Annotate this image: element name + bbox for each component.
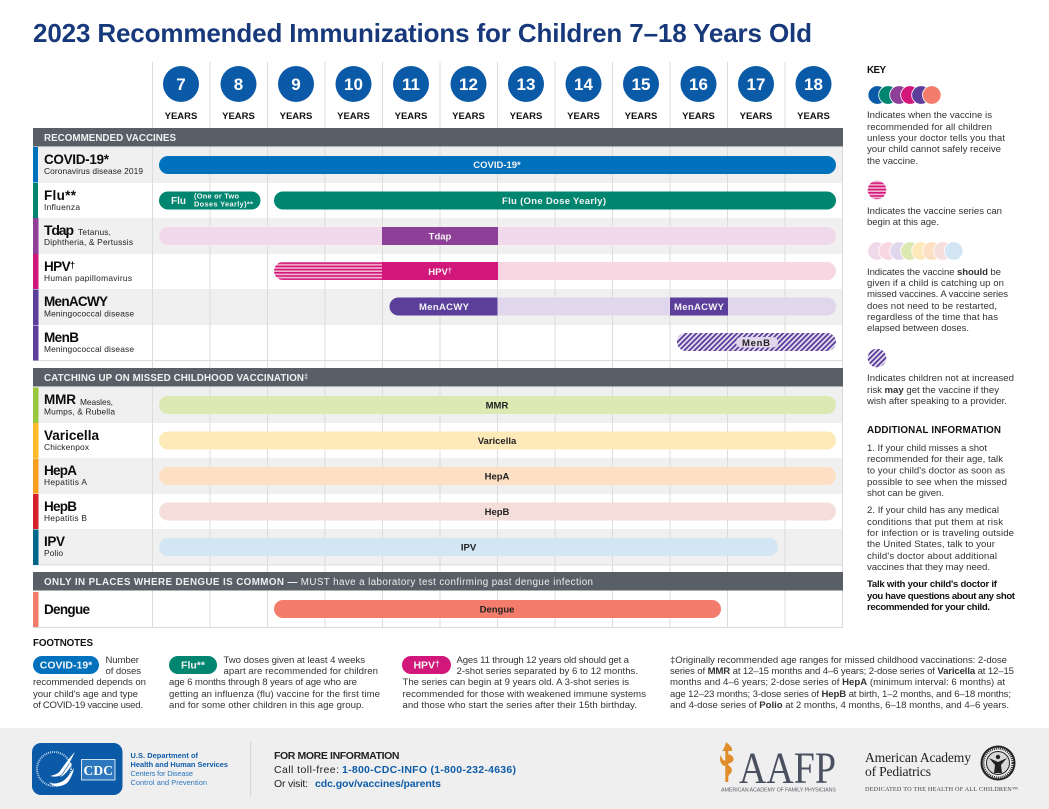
age header: 14 bbox=[574, 75, 593, 94]
section band: dengue bbox=[33, 572, 843, 590]
contact information: cdc.gov/vaccines/parents bbox=[315, 778, 441, 790]
section band: recommended vaccines bbox=[33, 128, 843, 146]
row: MenACWY: MenACWY bbox=[44, 294, 108, 309]
footnote: Flu: age 6 months through 8 years of age who are bbox=[169, 677, 357, 688]
footnote: catch-up ages: months and 4–6 years; 2-dose series of HepA (minimum interval: 6 months) at bbox=[670, 677, 1005, 688]
row: COVID-19 bbox=[33, 147, 836, 182]
row: HepB: HepB bbox=[485, 507, 510, 518]
footnote: HPV: Ages 11 through 12 years old should get a bbox=[456, 655, 630, 666]
key: striped text: begin at this age. bbox=[867, 217, 939, 228]
age header: 9 bbox=[291, 75, 301, 94]
row: Tdap: Tetanus, bbox=[78, 227, 111, 237]
row: Flu: (One or Two bbox=[194, 192, 239, 200]
row: Dengue: Dengue bbox=[480, 604, 514, 616]
key: striped text: Indicates the vaccine series can bbox=[867, 206, 1002, 217]
logo: American Academy of Pediatrics bbox=[865, 746, 1018, 793]
key: catch-up text: Indicates the vaccine should be bbox=[867, 267, 1001, 278]
additional information: possible to see when the missed bbox=[867, 477, 1007, 488]
age header: YEARS bbox=[797, 111, 830, 122]
age header: 10 bbox=[344, 75, 363, 94]
row: IPV: Polio bbox=[44, 548, 63, 558]
key: catch-up text bbox=[867, 267, 1008, 334]
row: Varicella: Varicella bbox=[478, 436, 517, 447]
HHS text: Health and Human Services bbox=[130, 760, 228, 769]
row: MMR bbox=[33, 388, 836, 423]
row: Flu: Doses Yearly)** bbox=[194, 200, 253, 208]
section band: catching up: ‡ bbox=[304, 374, 308, 381]
logo: CDC: CDC bbox=[84, 763, 113, 778]
additional information: vaccines that they may need. bbox=[867, 562, 990, 573]
age header: YEARS bbox=[740, 111, 772, 122]
key: catch-up text: elapsed between doses. bbox=[867, 323, 969, 334]
row: Flu: Flu bbox=[171, 196, 186, 207]
additional information: shot can be given. bbox=[867, 488, 944, 499]
age header: 8 bbox=[234, 75, 243, 94]
row: Tdap: Tdap bbox=[44, 222, 74, 238]
row: HepB: Hepatitis B bbox=[44, 513, 87, 523]
age header: 17 bbox=[747, 75, 765, 94]
footnote: COVID-19: COVID-19* bbox=[40, 660, 93, 672]
age header: 13 bbox=[517, 75, 535, 94]
additional information: you have questions about any shot bbox=[867, 591, 1016, 602]
key: recommended text: unless your doctor tells you that bbox=[867, 133, 1005, 144]
key: hatched swatch bbox=[868, 349, 886, 367]
key: recommended text: Indicates when the vaccine is bbox=[867, 110, 992, 121]
row: HPV bbox=[33, 254, 836, 289]
age header: 11 bbox=[402, 75, 420, 94]
HHS text: U.S. Department of bbox=[130, 751, 199, 760]
footnote: COVID-19: your child's age and type bbox=[33, 689, 138, 700]
footnote: catch-up ages: series of MMR at 12–15 months and 4–6 years; 2-dose series of Varicella at 12–15 bbox=[670, 666, 1014, 677]
row: Flu: Influenza bbox=[44, 202, 80, 212]
row: HepA: HepA bbox=[44, 463, 77, 478]
key: catch-up text: regardless of the time that has bbox=[867, 312, 998, 323]
footnote: Flu: Two doses given at least 4 weeks bbox=[224, 655, 365, 666]
age header: YEARS bbox=[510, 111, 542, 122]
row: MenACWY: Meningococcal disease bbox=[44, 308, 134, 318]
row: Flu bbox=[33, 183, 836, 218]
row: HepA: HepA bbox=[485, 472, 510, 482]
section band: recommended vaccines: RECOMMENDED VACCINES bbox=[44, 133, 176, 144]
footnote: HPV: recommended for those with weakened immune systems bbox=[402, 689, 646, 700]
row: HepA bbox=[33, 458, 836, 494]
age header: YEARS bbox=[625, 111, 657, 122]
footnote: catch-up ages: age 12–23 months; 3-dose series of HepB at birth, 1–2 months, and 6–18 months; bbox=[670, 689, 1011, 700]
row: MenACWY bbox=[33, 290, 836, 325]
contact information bbox=[274, 750, 516, 790]
key: catch-up text: missed vaccines. A vaccine series bbox=[867, 289, 1008, 300]
footnote: Flu: and for some other children in this age group. bbox=[169, 700, 364, 711]
row: Varicella bbox=[33, 423, 836, 458]
row: HepB: HepB bbox=[44, 499, 77, 514]
additional information: ADDITIONAL INFORMATION bbox=[867, 425, 1001, 436]
footnote: COVID-19 bbox=[33, 655, 146, 711]
age header: 7 bbox=[176, 75, 186, 94]
row: COVID-19: Coronavirus disease 2019 bbox=[44, 166, 143, 176]
row: MMR: Mumps, & Rubella bbox=[44, 406, 115, 416]
row: HepA: Hepatitis A bbox=[44, 477, 87, 487]
footnote: HPV: HPV bbox=[413, 660, 435, 672]
additional information: to your child's doctor as soon as bbox=[867, 466, 1005, 476]
row: Flu: Flu (One Dose Yearly) bbox=[502, 196, 606, 207]
footer divider bbox=[250, 742, 251, 797]
age header: YEARS bbox=[222, 111, 255, 122]
age header: 15 bbox=[632, 75, 650, 94]
age header: YEARS bbox=[567, 111, 600, 122]
footnote: Flu: Flu** bbox=[181, 660, 206, 672]
key: recommended text: your child cannot safely receive bbox=[867, 144, 1001, 155]
row: Varicella: Chickenpox bbox=[44, 442, 90, 452]
row: MenB bbox=[33, 326, 836, 360]
footnote: COVID-19: Number bbox=[106, 655, 140, 666]
age header: 16 bbox=[689, 75, 708, 94]
additional information bbox=[867, 425, 1016, 613]
row: IPV: IPV bbox=[44, 534, 65, 549]
key: catch-up swatches bbox=[868, 242, 963, 260]
key: recommended text: recommended for all children bbox=[867, 122, 992, 133]
additional information: recommended for their age, talk bbox=[867, 454, 1003, 465]
footnote: HPV: and those who start the series after their 15th birthday. bbox=[402, 700, 637, 711]
row: HepB bbox=[33, 494, 836, 529]
age header: YEARS bbox=[395, 111, 427, 122]
key: recommended swatches bbox=[868, 86, 941, 104]
row: MMR: MMR bbox=[486, 400, 508, 412]
row: MenB: MenB bbox=[742, 338, 770, 349]
section band: catching up bbox=[33, 368, 843, 386]
row: HPV: HPV bbox=[44, 259, 71, 274]
additional information: conditions that put them at risk bbox=[867, 517, 1003, 528]
row: MMR: Measles, bbox=[80, 397, 113, 407]
row: HPV: † bbox=[70, 260, 75, 270]
footnote: catch-up ages bbox=[670, 655, 1014, 711]
row shading and grid bbox=[33, 62, 843, 628]
contact information: Or visit: bbox=[274, 778, 308, 790]
additional information: 2. If your child has any medical bbox=[867, 505, 999, 516]
row: IPV: IPV bbox=[461, 542, 477, 554]
title: 2023 Recommended Immunizations for Children 7–18 Years Old bbox=[33, 18, 812, 48]
row: MMR: MMR bbox=[44, 392, 76, 407]
footnote: Flu: apart are recommended for children bbox=[224, 666, 378, 677]
logo: CDC bbox=[32, 743, 122, 795]
footnote: COVID-19: of doses bbox=[106, 666, 141, 677]
footnote: COVID-19: of COVID-19 vaccine used. bbox=[33, 700, 143, 711]
age header: 12 bbox=[459, 75, 478, 94]
row: Dengue: Dengue bbox=[44, 602, 90, 617]
footnote: Flu: getting an influenza (flu) vaccine for the first time bbox=[169, 689, 380, 700]
row: HPV: HPV bbox=[428, 267, 448, 278]
footnote: Flu bbox=[169, 655, 380, 711]
additional information: child's doctor about additional bbox=[867, 551, 997, 562]
row: MenB: Meningococcal disease bbox=[44, 344, 134, 354]
contact information: 1-800-CDC-INFO (1-800-232-4636) bbox=[342, 764, 516, 776]
key bbox=[866, 65, 1014, 407]
footnotes heading: FOOTNOTES bbox=[33, 638, 93, 649]
row: Flu: Flu** bbox=[44, 188, 77, 203]
key: hatched text: wish after speaking to a provider. bbox=[866, 396, 1007, 407]
logo: American Academy of Pediatrics: DEDICATED TO THE HEALTH OF ALL CHILDREN™ bbox=[865, 786, 1018, 793]
key: hatched text bbox=[866, 373, 1014, 407]
additional information: 1. If your child misses a shot bbox=[867, 443, 987, 454]
key: catch-up text: given if a child is catching up on bbox=[867, 278, 1004, 289]
row: MenACWY: MenACWY bbox=[419, 302, 470, 313]
logo: American Academy of Pediatrics: American Academy bbox=[865, 750, 971, 765]
logo: AAFP: AMERICAN ACADEMY OF FAMILY PHYSICIANS bbox=[721, 788, 836, 794]
key: recommended text: the vaccine. bbox=[867, 156, 918, 167]
key: recommended text bbox=[867, 110, 1005, 167]
age header: 18 bbox=[804, 75, 823, 94]
age header: YEARS bbox=[280, 111, 312, 122]
age header: YEARS bbox=[165, 111, 197, 122]
age header bbox=[163, 66, 832, 122]
footnote: HPV: The series can begin at 9 years old. A 3-shot series is bbox=[402, 677, 629, 688]
row: MenACWY: MenACWY bbox=[674, 302, 725, 313]
row: Tdap: Diphtheria, & Pertussis bbox=[44, 237, 133, 247]
additional information: Talk with your child's doctor if bbox=[867, 579, 998, 590]
footnote: catch-up ages: ‡Originally recommended age ranges for missed childhood vaccinations: 2-dose bbox=[670, 655, 1007, 666]
row: COVID-19: COVID-19* bbox=[44, 152, 110, 167]
key: striped text bbox=[867, 206, 1002, 228]
logo: AAFP: AAFP bbox=[739, 744, 836, 792]
footer band bbox=[0, 728, 1049, 809]
logo: American Academy of Pediatrics: of Pediatrics bbox=[865, 764, 931, 779]
footnote: COVID-19: recommended depends on bbox=[33, 677, 146, 688]
row: HPV: Human papillomavirus bbox=[44, 273, 132, 283]
row: COVID-19: COVID-19* bbox=[473, 160, 521, 171]
HHS text: Control and Prevention bbox=[130, 778, 207, 787]
key: hatched text: risk may get the vaccine if they bbox=[867, 385, 999, 396]
age header: YEARS bbox=[682, 111, 715, 122]
additional information: recommended for your child. bbox=[867, 602, 990, 613]
key: KEY bbox=[867, 65, 886, 76]
section band: dengue: ONLY IN PLACES WHERE DENGUE IS COMMON — MUST have a laboratory test confirming past dengue infection bbox=[44, 577, 593, 588]
row: IPV bbox=[33, 530, 778, 565]
contact information: FOR MORE INFORMATION bbox=[274, 750, 400, 762]
contact information: Call toll-free: bbox=[274, 764, 339, 776]
key: hatched text: Indicates children not at increased bbox=[867, 373, 1014, 384]
HHS text bbox=[130, 751, 228, 787]
additional information: for infection or is traveling outside bbox=[867, 528, 1014, 539]
age header: YEARS bbox=[452, 111, 485, 122]
row: HPV: † bbox=[448, 268, 452, 275]
footnote: HPV bbox=[402, 655, 646, 711]
section band: catching up: CATCHING UP ON MISSED CHILDHOOD VACCINATION bbox=[44, 373, 304, 384]
footnote: HPV: † bbox=[435, 660, 440, 668]
HHS text: Centers for Disease bbox=[130, 769, 193, 778]
row: Tdap: Tdap bbox=[429, 232, 452, 242]
footnote: HPV: 2-shot series separated by 6 to 12 months. bbox=[456, 666, 638, 677]
key: striped swatch bbox=[868, 181, 886, 199]
row: Dengue bbox=[33, 592, 721, 627]
row: MenB: MenB bbox=[44, 330, 79, 345]
key: catch-up text: does not need to be restarted, bbox=[867, 301, 997, 312]
footnote: catch-up ages: and 4-dose series of Polio at 2 months, 4 months, 6–18 months, and 4–6 years. bbox=[670, 700, 1009, 711]
row: Varicella: Varicella bbox=[44, 428, 99, 443]
age header: YEARS bbox=[337, 111, 370, 122]
additional information: the United States, talk to your bbox=[867, 539, 996, 550]
row: Tdap bbox=[33, 218, 836, 254]
